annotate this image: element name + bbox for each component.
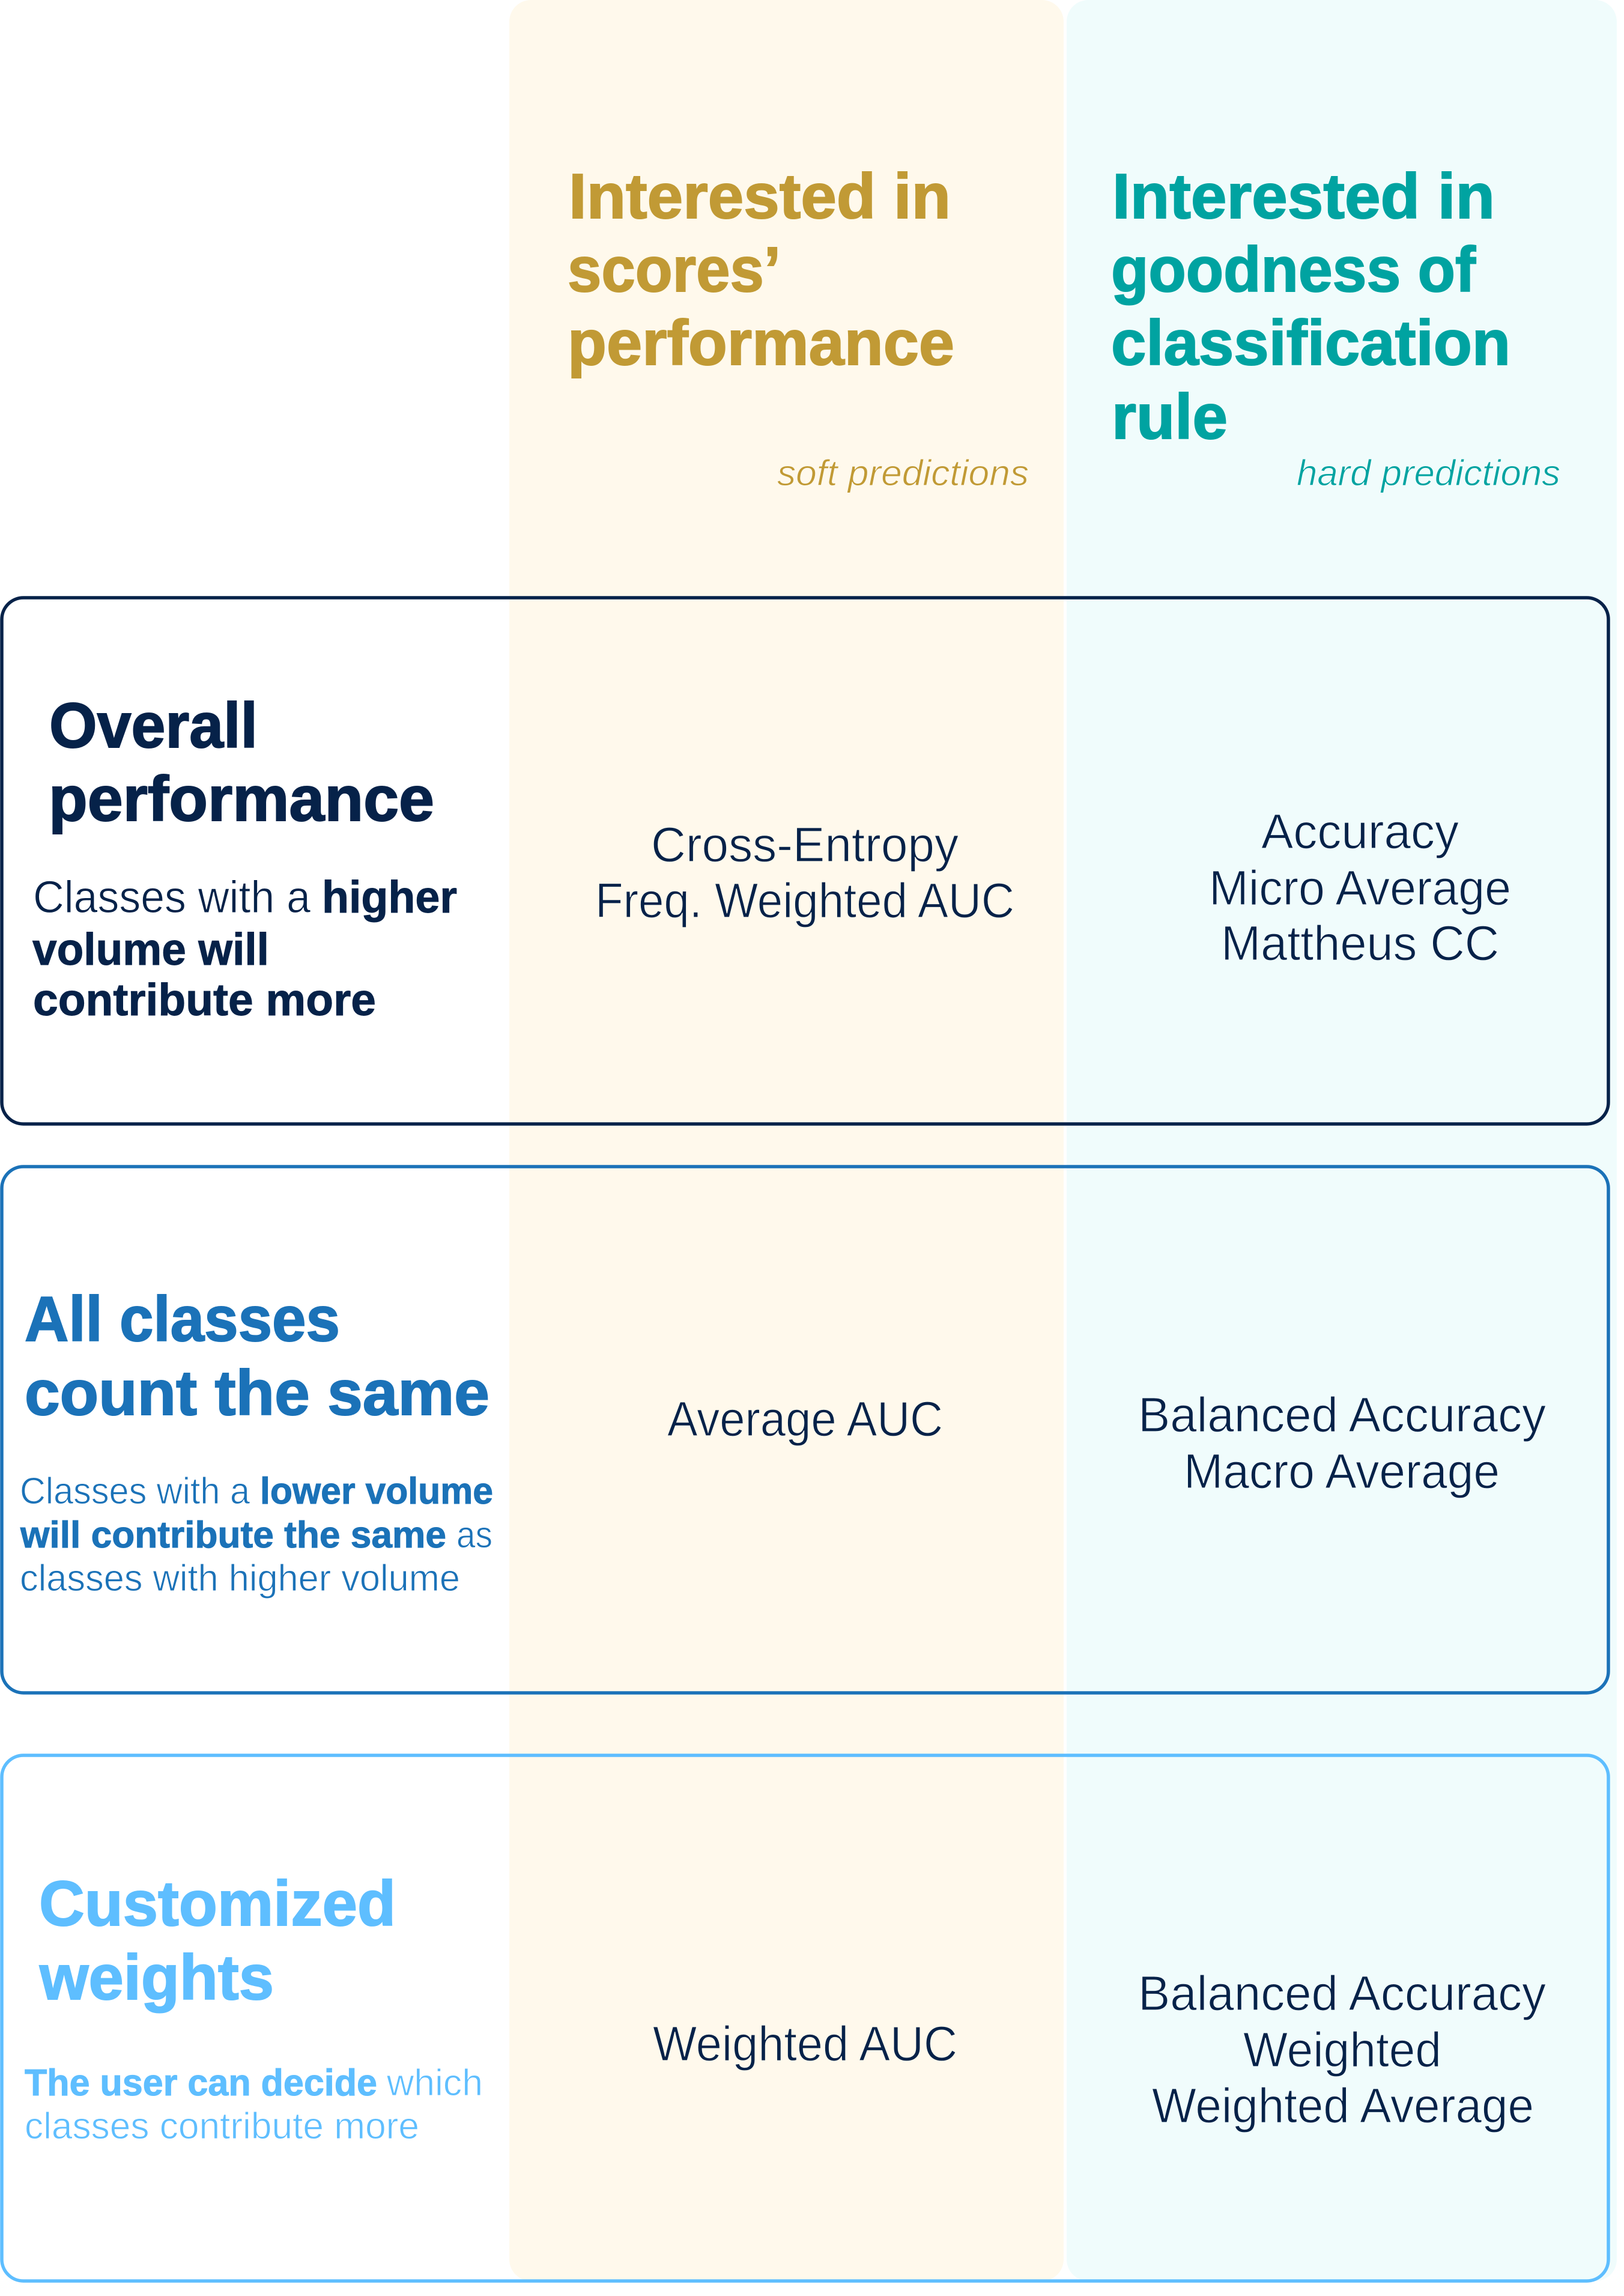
metrics: hard overall: Micro Average bbox=[1209, 861, 1511, 916]
description: all classes count the same: classes with higher volume bbox=[20, 1558, 460, 1599]
metrics: hard overall: Mattheus CC bbox=[1221, 916, 1499, 971]
description: overall performance: higher bbox=[322, 872, 457, 922]
description: customized weights: The user can decide bbox=[25, 2062, 377, 2104]
heading: overall performance: performance bbox=[49, 764, 434, 834]
heading: interested in goodness of classification rule bbox=[1111, 161, 1510, 452]
metrics: hard customized: Weighted bbox=[1243, 2023, 1441, 2077]
heading: customized weights: Customized bbox=[39, 1868, 396, 1939]
description: overall performance: volume will bbox=[32, 924, 269, 974]
metrics: soft overall bbox=[595, 818, 1014, 928]
heading: interested in scores' performance: Interested in bbox=[569, 161, 951, 232]
description: all classes count the same bbox=[20, 1471, 493, 1599]
metrics: hard equal: Macro Average bbox=[1184, 1444, 1500, 1499]
label: soft predictions: soft predictions bbox=[777, 453, 1029, 493]
panel: all classes count the same row bbox=[2, 1167, 1608, 1693]
description: all classes count the same: Classes with a bbox=[20, 1471, 250, 1512]
metrics: hard equal: Balanced Accuracy bbox=[1138, 1388, 1546, 1442]
description: overall performance: Classes with a bbox=[33, 872, 311, 922]
description: all classes count the same: as bbox=[456, 1514, 492, 1556]
metrics: hard equal bbox=[1138, 1388, 1546, 1499]
panel: overall performance row bbox=[2, 598, 1608, 1124]
heading: customized weights bbox=[39, 1868, 396, 2013]
metrics: hard overall: Accuracy bbox=[1261, 804, 1459, 859]
metrics: hard customized: Balanced Accuracy bbox=[1138, 1966, 1546, 2021]
heading: all classes count the same: All classes bbox=[25, 1284, 340, 1355]
heading: interested in scores' performance: scores’ bbox=[568, 234, 781, 305]
metrics: hard customized bbox=[1138, 1966, 1546, 2133]
description: customized weights: classes contribute more bbox=[25, 2106, 419, 2147]
metrics: soft customized: Weighted AUC bbox=[653, 2017, 957, 2071]
heading: customized weights: weights bbox=[39, 1942, 274, 2013]
description: overall performance bbox=[32, 872, 457, 1025]
heading: interested in scores' performance bbox=[568, 161, 954, 378]
description: customized weights bbox=[25, 2062, 483, 2147]
metrics: hard customized: Weighted Average bbox=[1152, 2079, 1534, 2133]
heading: interested in goodness of classification rule: rule bbox=[1112, 381, 1228, 452]
heading: all classes count the same: count the same bbox=[25, 1358, 489, 1429]
panel: soft predictions column bbox=[509, 0, 1064, 2281]
description: all classes count the same: will contribute the same bbox=[20, 1514, 446, 1556]
heading: overall performance bbox=[49, 690, 434, 834]
description: customized weights: which bbox=[386, 2062, 483, 2104]
panel: hard predictions column bbox=[1067, 0, 1617, 2281]
description: overall performance: contribute more bbox=[33, 974, 376, 1025]
label: hard predictions: hard predictions bbox=[1297, 453, 1560, 493]
heading: all classes count the same bbox=[25, 1284, 489, 1429]
panel: customized weights row bbox=[2, 1755, 1608, 2281]
heading: interested in goodness of classification rule: classification bbox=[1111, 308, 1510, 378]
metrics: soft overall: Cross-Entropy bbox=[651, 818, 959, 872]
metrics: hard overall bbox=[1209, 804, 1511, 971]
heading: interested in goodness of classification rule: goodness of bbox=[1111, 234, 1476, 305]
heading: interested in scores' performance: performance bbox=[568, 308, 954, 378]
metrics: soft overall: Freq. Weighted AUC bbox=[595, 873, 1014, 928]
heading: interested in goodness of classification rule: Interested in bbox=[1112, 161, 1495, 232]
heading: overall performance: Overall bbox=[49, 690, 258, 761]
description: all classes count the same: lower volume bbox=[260, 1471, 493, 1512]
metrics: soft equal: Average AUC bbox=[667, 1392, 943, 1447]
